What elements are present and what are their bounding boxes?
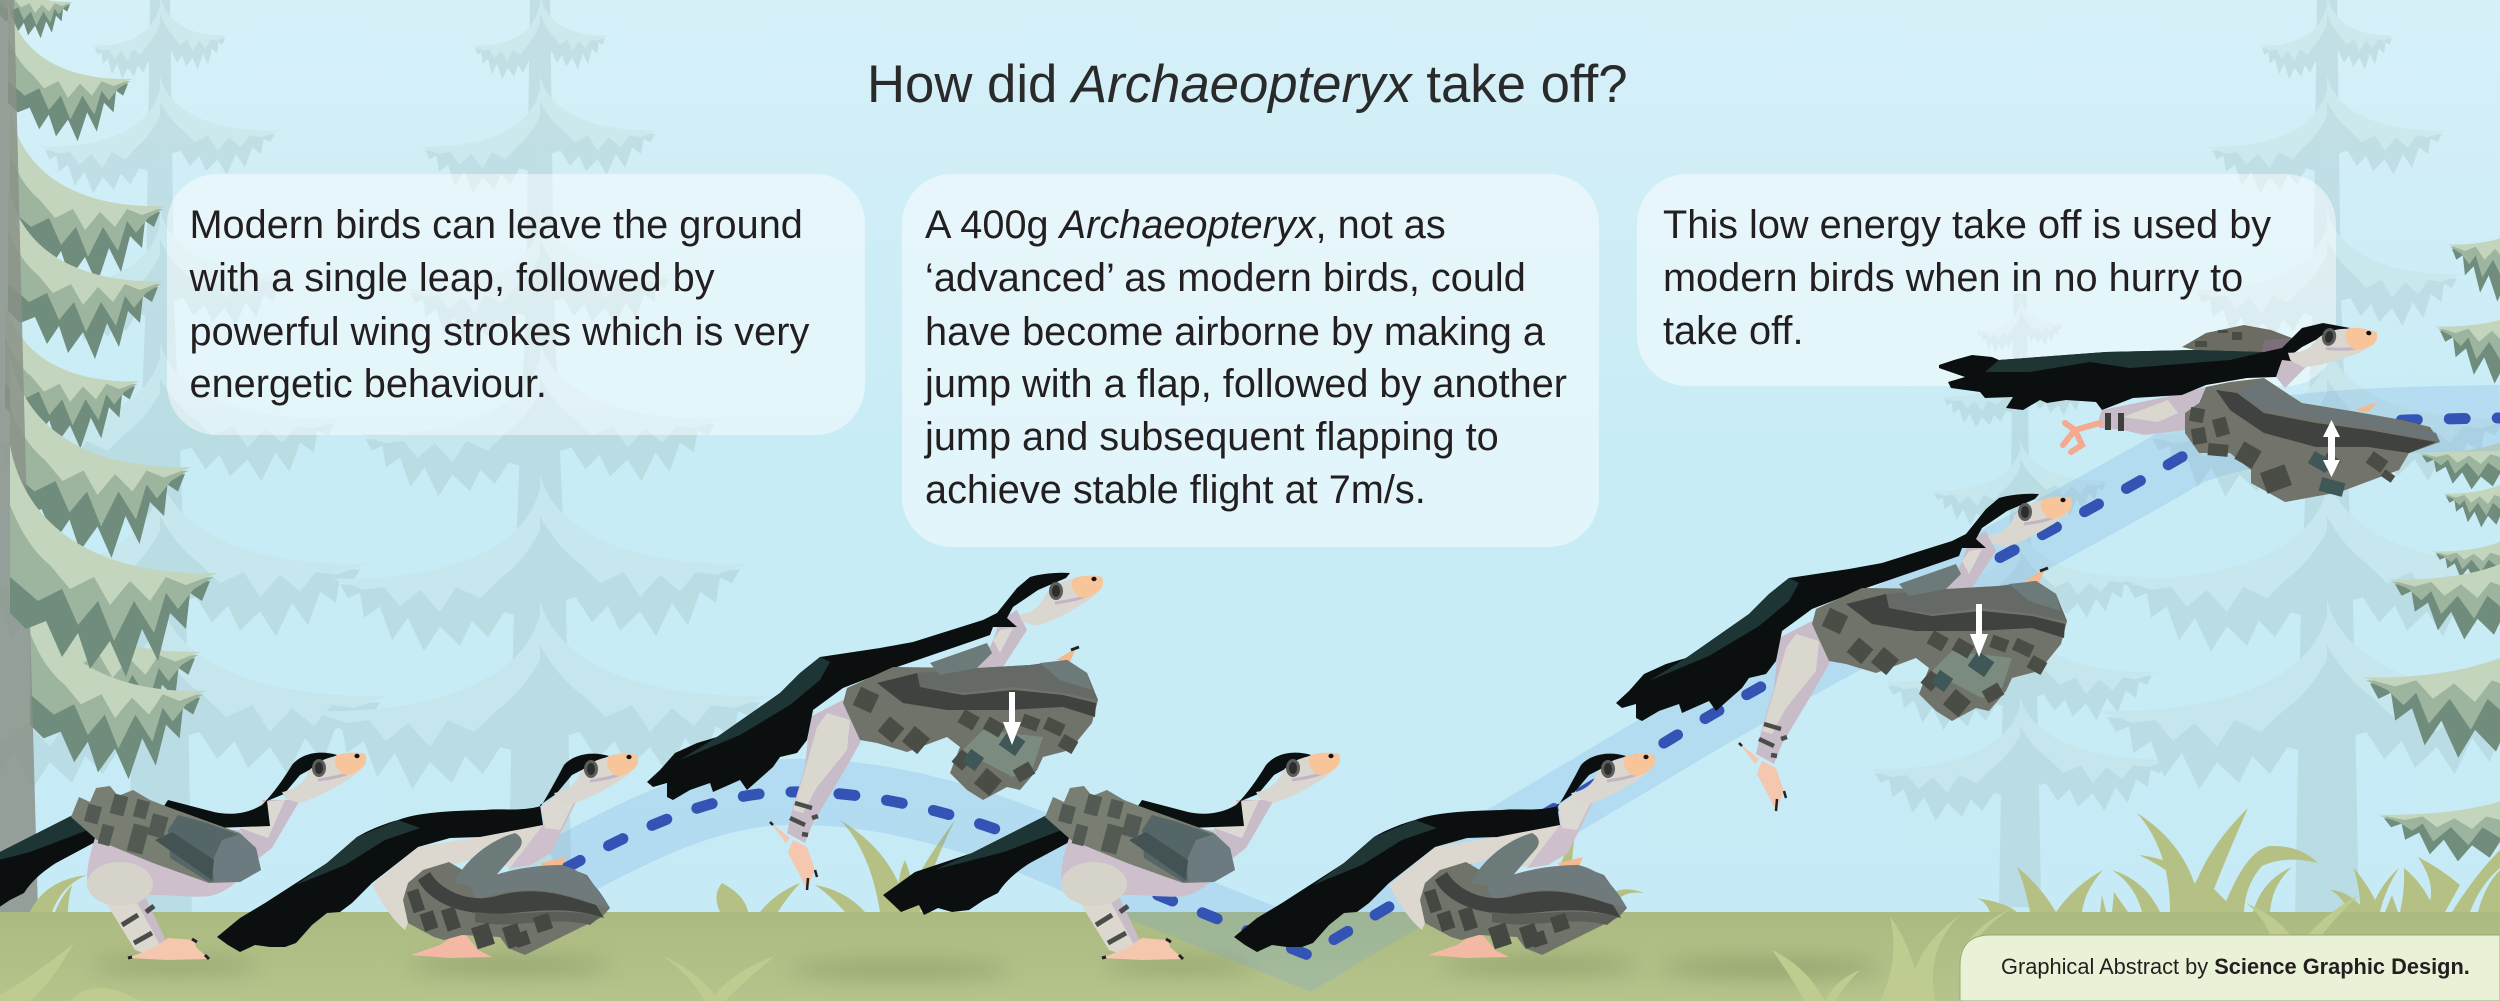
- title: How did Archaeopteryx take off?: [867, 55, 1628, 114]
- ground: [0, 912, 2500, 1001]
- bird 6: rising with downstroke: [1616, 494, 2072, 811]
- panel: Archaeopteryx: A 400g Archaeopteryx, not as: [925, 203, 1446, 247]
- bird 1: standing: [0, 753, 366, 960]
- background grass tufts: [30, 808, 2500, 912]
- foreground tree right: [2362, 174, 2500, 861]
- flight path band: [560, 418, 2500, 955]
- arrow: up and down wing beat: [2323, 420, 2340, 477]
- panel: Archaeopteryx: [902, 174, 1599, 547]
- panel: modern birds: Modern birds can leave the ground: [190, 203, 803, 247]
- ground shadows: [90, 958, 1880, 978]
- bird 2: crouching: [217, 754, 638, 958]
- foreground grass: [0, 895, 2359, 1001]
- panel: Archaeopteryx: have become airborne by making a: [925, 310, 1546, 354]
- foreground tree left: [0, 0, 218, 912]
- flight path dashes: [566, 418, 2500, 955]
- bird 4: standing: [883, 753, 1340, 960]
- panel: low energy take off: [1637, 174, 2336, 386]
- panel: low energy take off: take off.: [1663, 309, 1803, 353]
- panel: modern birds: powerful wing strokes which is very: [190, 310, 809, 354]
- panel: low energy take off: This low energy take off is used by: [1663, 203, 2271, 247]
- credit box: [1960, 935, 2500, 1001]
- panel: modern birds: energetic behaviour.: [190, 362, 547, 406]
- panel: modern birds: [167, 174, 865, 435]
- bird 7: level flight: [1939, 314, 2440, 502]
- bird 5: crouching: [1234, 754, 1655, 958]
- panel: low energy take off: modern birds when in no hurry to: [1663, 256, 2243, 300]
- arrow: downstroke bird 3: [1003, 692, 1021, 745]
- credit box: Graphical Abstract by Science Graphic Design.: [2001, 954, 2470, 979]
- bird 3: jump with downstroke: [647, 573, 1103, 890]
- panel: Archaeopteryx: ‘advanced’ as modern birds, could: [925, 256, 1526, 300]
- panel: Archaeopteryx: achieve stable flight at 7m/s.: [925, 468, 1426, 512]
- panel: Archaeopteryx: jump and subsequent flapping to: [924, 415, 1499, 459]
- panel: Archaeopteryx: jump with a flap, followed by another: [924, 362, 1567, 406]
- panel: modern birds: with a single leap, followed by: [188, 256, 715, 300]
- arrow: downstroke bird 6: [1970, 604, 1988, 657]
